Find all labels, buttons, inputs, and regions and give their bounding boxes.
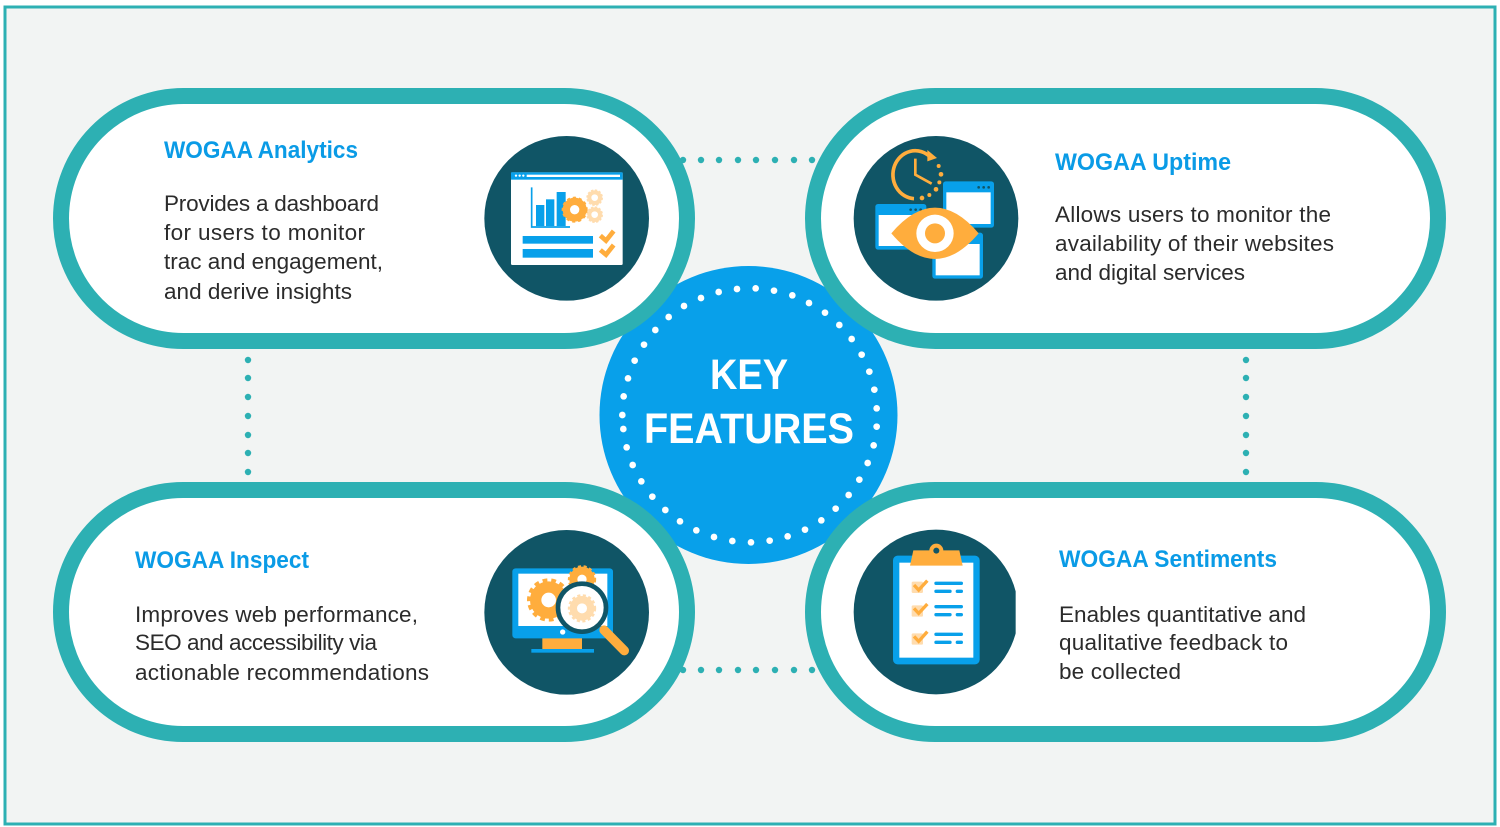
panel: WOGAA Uptime — [813, 96, 1438, 341]
heading: WOGAA Uptime: WOGAA Uptime — [1055, 149, 1231, 176]
connector: bottom dotted line — [680, 667, 815, 673]
text block: sentiments description: Enables quantitative and — [1059, 602, 1306, 627]
panel: WOGAA Sentiments — [813, 490, 1438, 734]
text block: inspect description: SEO and accessibility via — [135, 630, 377, 655]
heading: key features — [644, 351, 854, 453]
heading: WOGAA Analytics: WOGAA Analytics — [164, 137, 358, 164]
text block: sentiments description: be collected — [1059, 659, 1181, 684]
connector: top dotted line — [680, 157, 815, 163]
text block: inspect description: actionable recommendations — [135, 660, 429, 685]
text block: uptime description: availability of their websites — [1055, 231, 1334, 256]
heading: WOGAA Inspect: WOGAA Inspect — [135, 547, 309, 574]
icon: clipboard checklist — [854, 530, 1016, 694]
icon: dashboard window — [484, 136, 649, 301]
text block: uptime description — [1055, 202, 1334, 285]
text block: analytics description: trac and engagement, — [164, 249, 383, 274]
text block: analytics description: Provides a dashboard — [164, 191, 379, 216]
icon: clock, windows and eye — [854, 136, 1018, 301]
heading: key features: FEATURES — [644, 405, 854, 453]
text block: sentiments description: qualitative feedback to — [1059, 630, 1288, 655]
text block: sentiments description — [1059, 602, 1306, 684]
text block: uptime description: Allows users to monitor the — [1055, 202, 1331, 227]
text block: uptime description: and digital services — [1055, 260, 1245, 285]
panel: WOGAA Analytics — [61, 96, 687, 341]
text block: analytics description: and derive insights — [164, 279, 352, 304]
central badge: key features — [600, 266, 898, 564]
text block: analytics description: for users to monitor — [164, 220, 366, 245]
icon: monitor with magnifier — [484, 530, 649, 695]
text block: analytics description — [164, 191, 383, 304]
connector: left dotted line — [245, 357, 251, 475]
connector: right dotted line — [1243, 357, 1249, 475]
panel: WOGAA Inspect — [61, 490, 687, 734]
text block: inspect description: Improves web performance, — [135, 602, 418, 627]
heading: key features: KEY — [710, 351, 788, 399]
heading: WOGAA Sentiments: WOGAA Sentiments — [1059, 546, 1277, 573]
text block: inspect description — [135, 602, 429, 685]
